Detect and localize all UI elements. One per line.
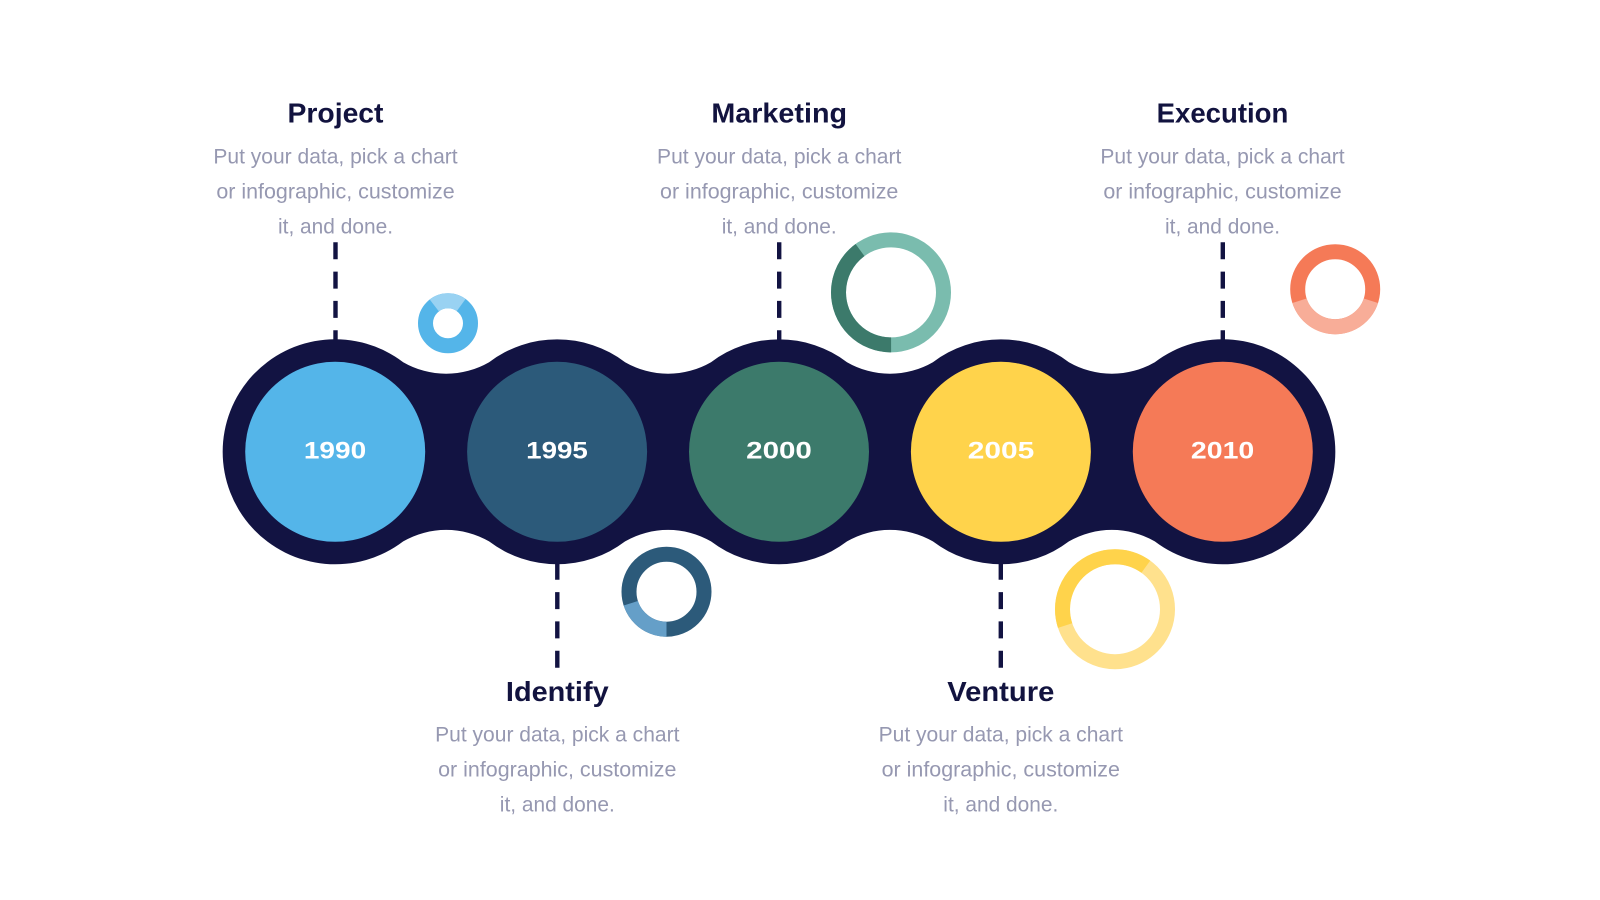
text block: Marketing: Marketing [711, 98, 847, 129]
text block: Marketing: it, and done. [722, 215, 837, 238]
node: 2005 [911, 362, 1091, 542]
donut: orange 60% [1298, 252, 1373, 327]
text block: Execution: Execution [1157, 98, 1288, 129]
node: 1990 [245, 362, 425, 542]
text block: Identify: Put your data, pick a chart [435, 724, 680, 747]
text block: Execution: Put your data, pick a chart [1100, 145, 1345, 168]
timeline band [223, 339, 1335, 564]
text block: Identify: or infographic, customize [438, 759, 676, 782]
node: 2010: 2010 [1191, 438, 1254, 464]
text block: Venture: Put your data, pick a chart [879, 724, 1123, 747]
text block: Venture: or infographic, customize [882, 759, 1120, 782]
text block: Execution: it, and done. [1165, 215, 1280, 238]
text block: Project: Project [288, 98, 384, 129]
text block: Marketing [657, 98, 902, 238]
text block: Identify [435, 676, 680, 817]
node: 1990: 1990 [304, 438, 366, 464]
connector: Execution [1221, 242, 1225, 345]
text block: Venture: it, and done. [943, 794, 1058, 817]
text block: Venture: Venture [947, 676, 1054, 707]
text block: Project: it, and done. [278, 215, 393, 238]
text block: Identify: Identify [506, 676, 609, 707]
text block: Execution [1100, 98, 1345, 238]
text block: Venture [879, 676, 1123, 817]
connector: Project [333, 242, 338, 345]
connector: Venture [999, 558, 1003, 668]
text block: Identify: it, and done. [500, 794, 615, 817]
connector: Marketing [777, 242, 781, 345]
text block: Marketing: Put your data, pick a chart [657, 145, 902, 168]
node: 2010 [1133, 362, 1313, 542]
text block: Execution: or infographic, customize [1103, 180, 1342, 203]
node: 2000 [689, 362, 869, 542]
node: 2000: 2000 [746, 438, 812, 464]
donut: green 40% [838, 240, 944, 345]
node: 1995 [467, 362, 647, 542]
text block: Project: Put your data, pick a chart [213, 145, 458, 168]
donut: yellow 40% [1062, 557, 1168, 662]
connector: Identify [555, 558, 559, 668]
text block: Project: or infographic, customize [216, 180, 455, 203]
donut: dark blue 80% [629, 554, 704, 629]
node: 1995: 1995 [526, 438, 588, 464]
donut: light blue 20% [426, 301, 470, 346]
node: 2005: 2005 [968, 438, 1034, 464]
text block: Marketing: or infographic, customize [660, 180, 898, 203]
text block: Project [213, 98, 458, 238]
